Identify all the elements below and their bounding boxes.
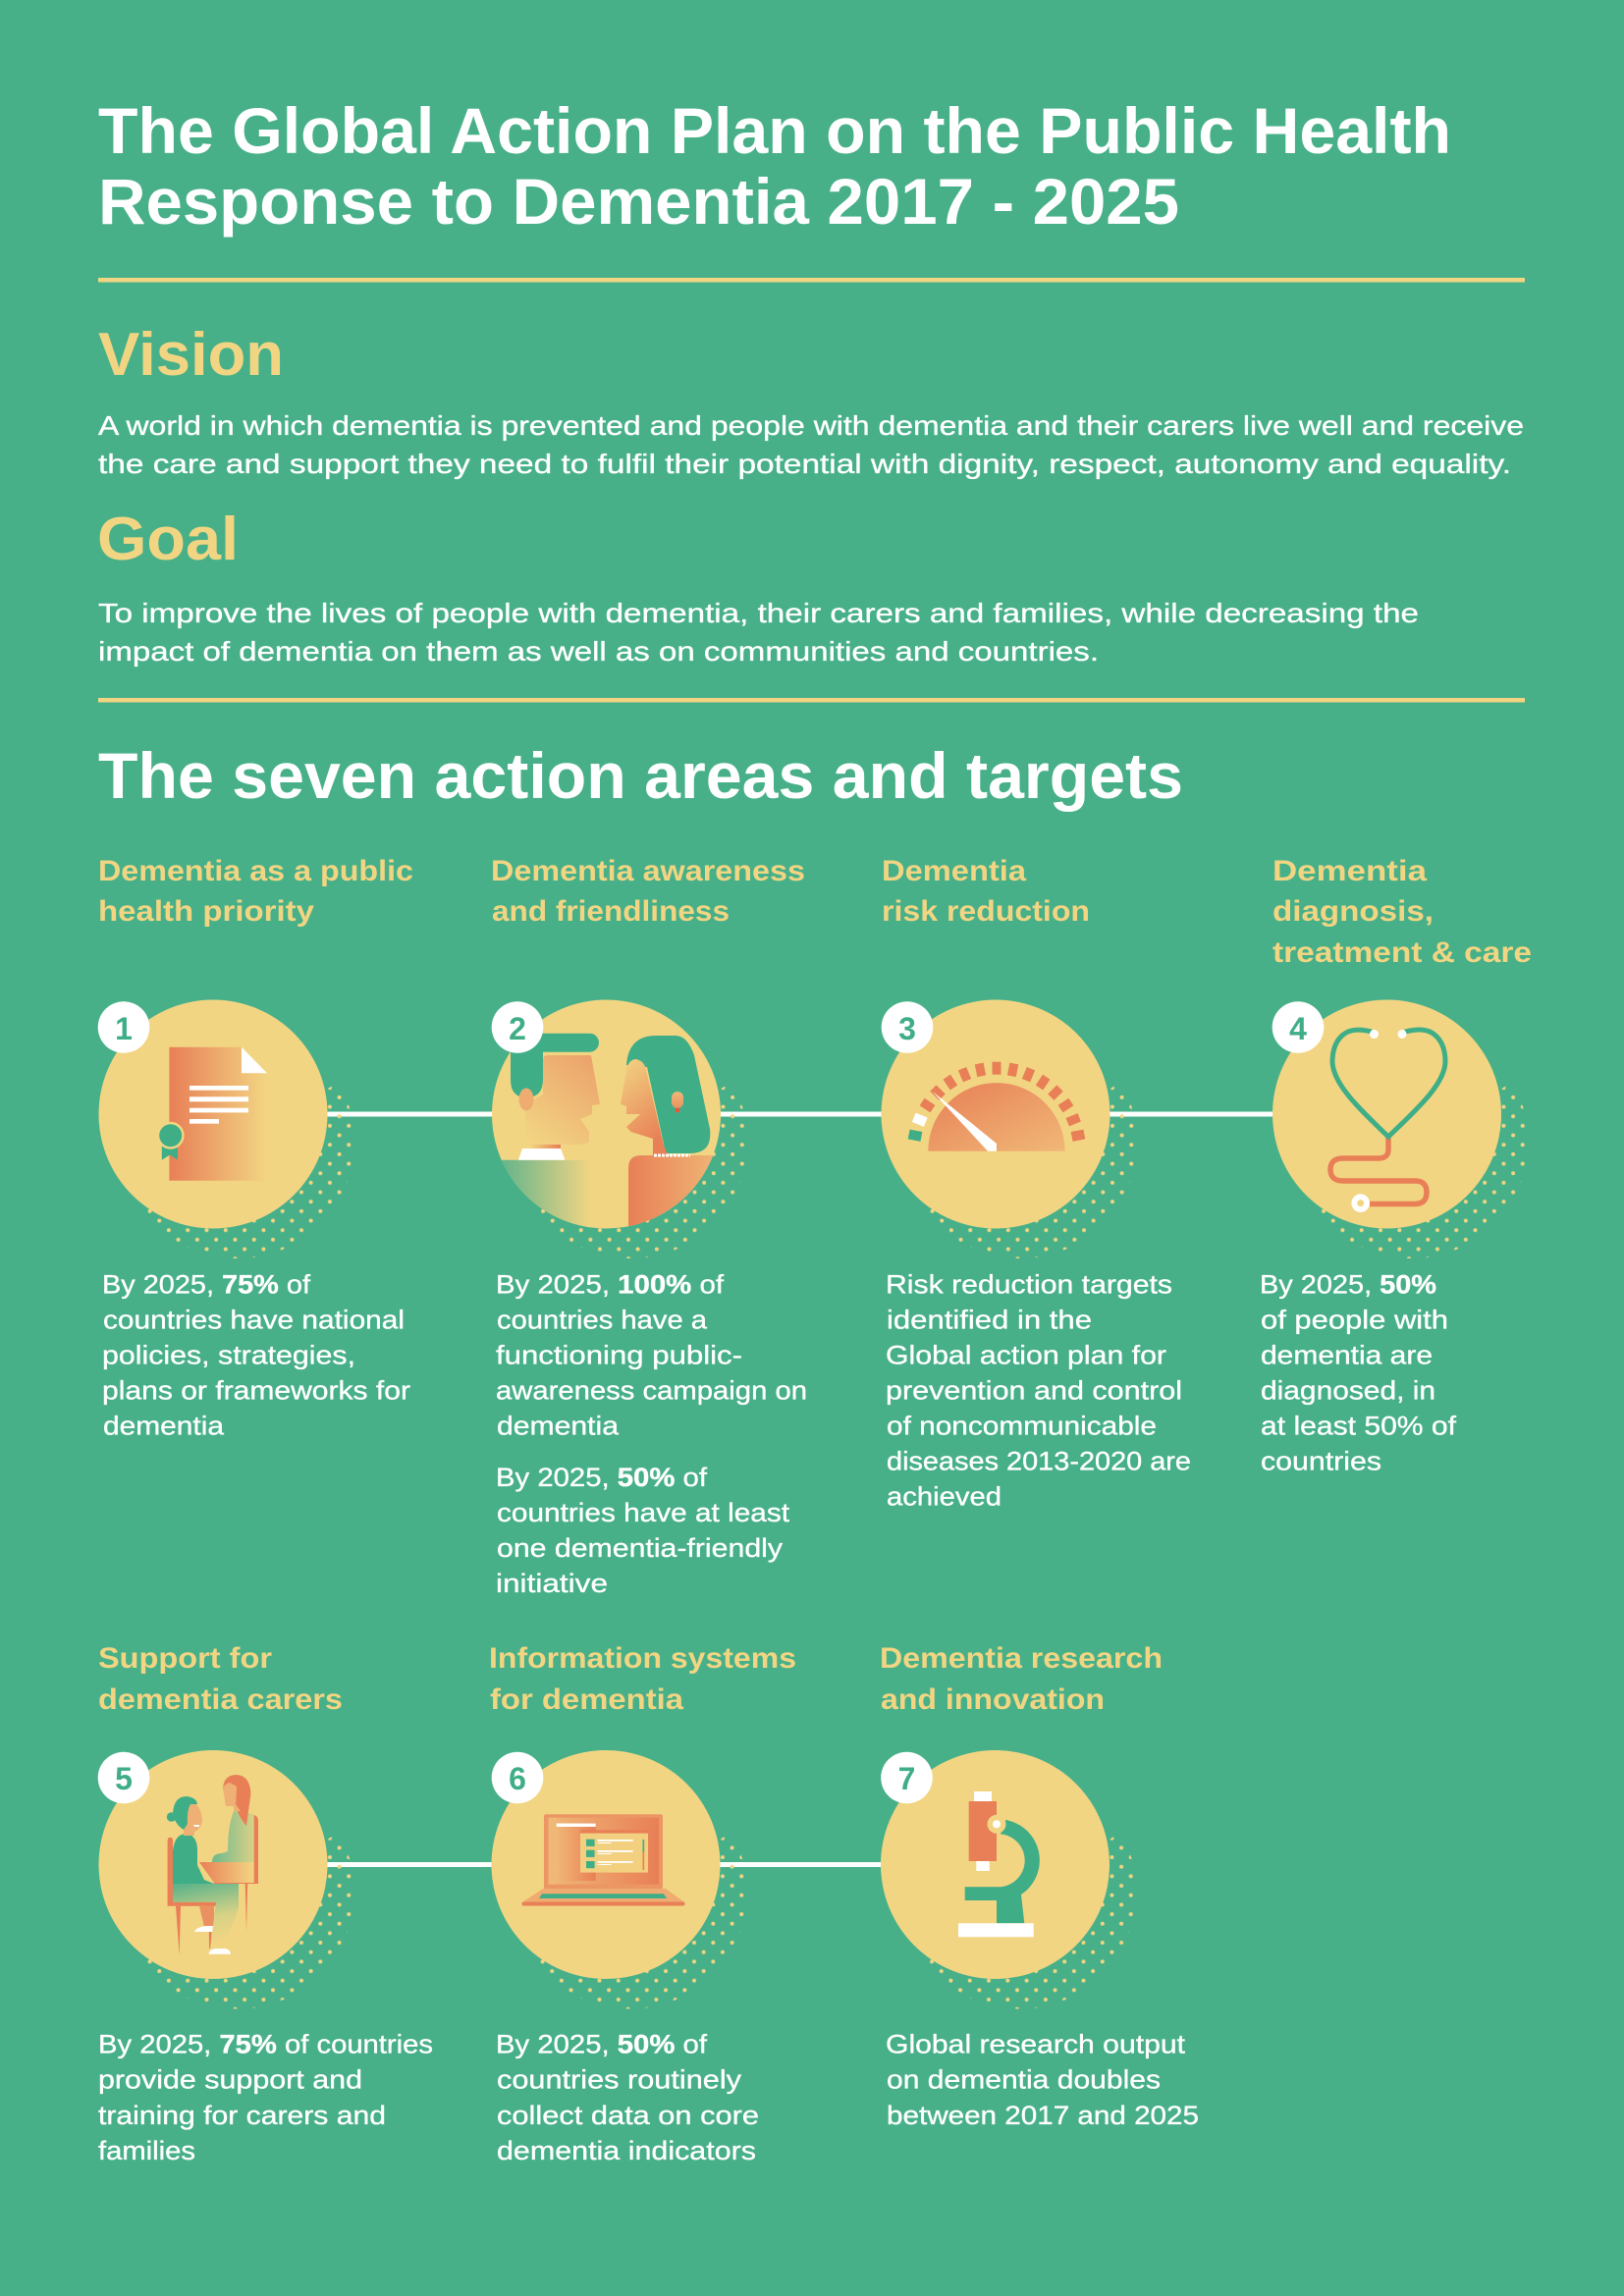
heading 6: for dementia: [490, 1683, 683, 1716]
target text 1: [102, 1270, 410, 1441]
target text 1: dementia: [103, 1412, 225, 1441]
number badge 3: [882, 1001, 933, 1053]
icon: carer and person at table: [167, 1775, 258, 1955]
heading 2: [491, 855, 805, 928]
dot halftone 6: [540, 1837, 744, 2008]
circle 3: [882, 999, 1110, 1229]
target text 3: achieved: [887, 1482, 1001, 1512]
number badge 5: [98, 1752, 149, 1803]
panel: action area 1: [98, 855, 413, 1441]
target text 3: Risk reduction targets: [886, 1270, 1172, 1300]
target text 3: identified in the: [887, 1306, 1092, 1335]
dot halftone 2: [540, 1086, 744, 1258]
connector: row two: [324, 1862, 884, 1867]
target text 5: [98, 2030, 433, 2165]
target text 3: Global action plan for: [886, 1341, 1166, 1370]
heading 7: and innovation: [881, 1683, 1105, 1716]
panel: action area 6: [489, 1642, 796, 2165]
text: vision statement: A world in which dementia is prevented and people with dementia and their carers live well and receive: [98, 410, 1524, 441]
target text 2: awareness campaign on: [496, 1376, 807, 1406]
icon: microscope: [958, 1791, 1040, 1937]
target text 2: By 2025, 50% of: [496, 1463, 708, 1492]
icon: risk gauge: [908, 1062, 1085, 1151]
target text 1: countries have national: [103, 1306, 405, 1335]
icon: document with seal: [157, 1047, 267, 1181]
target text 3: [886, 1270, 1191, 1512]
target text 2: By 2025, 100% of: [496, 1270, 725, 1300]
target text 4: dementia are: [1261, 1341, 1433, 1370]
heading 3: Dementia: [882, 855, 1026, 887]
panel: action area 7: [880, 1642, 1199, 2130]
target text 6: [496, 2030, 759, 2165]
heading 1: health priority: [98, 895, 314, 928]
target text 4: By 2025, 50%: [1260, 1270, 1436, 1300]
text: vision statement: the care and support they need to fulfil their potential with dignity, respect, autonomy and equality.: [98, 449, 1511, 479]
number badge 2: 2: [509, 1011, 526, 1046]
target text 2: countries have at least: [497, 1498, 790, 1527]
panel: goal: [97, 506, 1419, 667]
target text 3: prevention and control: [886, 1376, 1182, 1406]
number badge 1: [98, 1001, 149, 1053]
heading 4: Dementia: [1272, 855, 1427, 887]
target text 1: plans or frameworks for: [102, 1376, 410, 1406]
title: [98, 94, 1451, 238]
target text 6: countries routinely: [497, 2065, 742, 2095]
target text 7: on dementia doubles: [887, 2065, 1161, 2095]
target text 5: By 2025, 75% of countries: [98, 2030, 433, 2059]
icon: laptop with data: [522, 1814, 685, 1906]
panel: action area 5: [98, 1642, 433, 2165]
icon: stethoscope: [1330, 1030, 1445, 1212]
circle 4: [1272, 999, 1501, 1229]
number badge 1: 1: [115, 1011, 133, 1046]
heading 4: [1272, 855, 1532, 969]
number badge 2: [492, 1001, 543, 1053]
target text 7: Global research output: [886, 2030, 1186, 2059]
heading 2: and friendliness: [492, 895, 730, 928]
target text 1: policies, strategies,: [102, 1341, 355, 1370]
target text 7: [886, 2030, 1199, 2130]
target text 3: of noncommunicable: [887, 1412, 1157, 1441]
heading 3: risk reduction: [882, 895, 1090, 928]
dot halftone 4: [1322, 1086, 1526, 1258]
target text 4: [1260, 1270, 1457, 1476]
connector: row one: [324, 1111, 1276, 1117]
panel: vision: [98, 321, 1524, 479]
number badge 3: 3: [898, 1011, 916, 1046]
target text 5: provide support and: [98, 2065, 362, 2095]
target text 4: countries: [1261, 1447, 1381, 1476]
target text 2: functioning public-: [496, 1341, 742, 1370]
target text 2: [496, 1270, 807, 1598]
panel: action area 4: [1260, 855, 1532, 1476]
target text 5: training for carers and: [98, 2101, 386, 2130]
target text 6: dementia indicators: [497, 2136, 756, 2165]
dot halftone 1: [147, 1086, 352, 1258]
dot halftone 5: [147, 1837, 352, 2008]
icon: two faces: [501, 1034, 722, 1237]
circle 7: [881, 1750, 1110, 1979]
number badge 6: [492, 1752, 543, 1803]
number badge 4: 4: [1289, 1011, 1307, 1046]
target text 6: By 2025, 50% of: [496, 2030, 708, 2059]
circle 2: [492, 999, 721, 1229]
target text 2: countries have a: [497, 1306, 708, 1335]
number badge 7: 7: [898, 1761, 915, 1796]
heading 6: [489, 1642, 796, 1716]
target text 4: at least 50% of: [1261, 1412, 1457, 1441]
number badge 5: 5: [115, 1761, 133, 1796]
heading 4: diagnosis,: [1272, 895, 1434, 928]
target text 1: By 2025, 75% of: [102, 1270, 311, 1300]
panel: action area 2: [491, 855, 807, 1598]
heading 7: [880, 1642, 1163, 1716]
title: The Global Action Plan on the Public Health: [98, 94, 1451, 167]
circle 5: [98, 1750, 328, 1979]
heading: seven action areas: The seven action areas and targets: [98, 739, 1183, 812]
heading 4: treatment & care: [1272, 936, 1532, 969]
target text 5: families: [98, 2136, 195, 2165]
heading 6: Information systems: [489, 1642, 796, 1675]
heading 2: Dementia awareness: [491, 855, 805, 887]
circle 6: [491, 1750, 721, 1979]
target text 2: one dementia-friendly: [497, 1533, 784, 1563]
target text 4: of people with: [1261, 1306, 1448, 1335]
heading 5: [98, 1642, 343, 1716]
target text 3: diseases 2013-2020 are: [887, 1447, 1191, 1476]
number badge 7: [881, 1752, 933, 1803]
text: goal statement: To improve the lives of people with dementia, their carers and families, while decreasing the: [98, 598, 1419, 628]
target text 7: between 2017 and 2025: [887, 2101, 1199, 2130]
heading 5: Support for: [98, 1642, 272, 1675]
heading: goal: Goal: [97, 506, 239, 573]
text: goal statement: impact of dementia on them as well as on communities and countries.: [98, 636, 1099, 667]
text: vision statement: [98, 410, 1524, 479]
target text 6: collect data on core: [497, 2101, 759, 2130]
number badge 6: 6: [509, 1761, 526, 1796]
target text 2: dementia: [497, 1412, 620, 1441]
heading 1: [98, 855, 413, 928]
heading 7: Dementia research: [880, 1642, 1163, 1675]
title: Response to Dementia 2017 - 2025: [98, 165, 1179, 238]
heading 3: [882, 855, 1090, 928]
heading: vision: Vision: [98, 321, 284, 389]
target text 4: diagnosed, in: [1261, 1376, 1435, 1406]
heading 1: Dementia as a public: [98, 855, 413, 887]
number badge 4: [1272, 1001, 1324, 1053]
dot halftone 7: [929, 1837, 1133, 2008]
heading 5: dementia carers: [98, 1683, 343, 1716]
text: goal statement: [98, 598, 1419, 667]
panel: action area 3: [882, 855, 1191, 1512]
dot halftone 3: [930, 1086, 1134, 1258]
circle 1: [98, 999, 328, 1229]
target text 2: initiative: [496, 1569, 608, 1598]
